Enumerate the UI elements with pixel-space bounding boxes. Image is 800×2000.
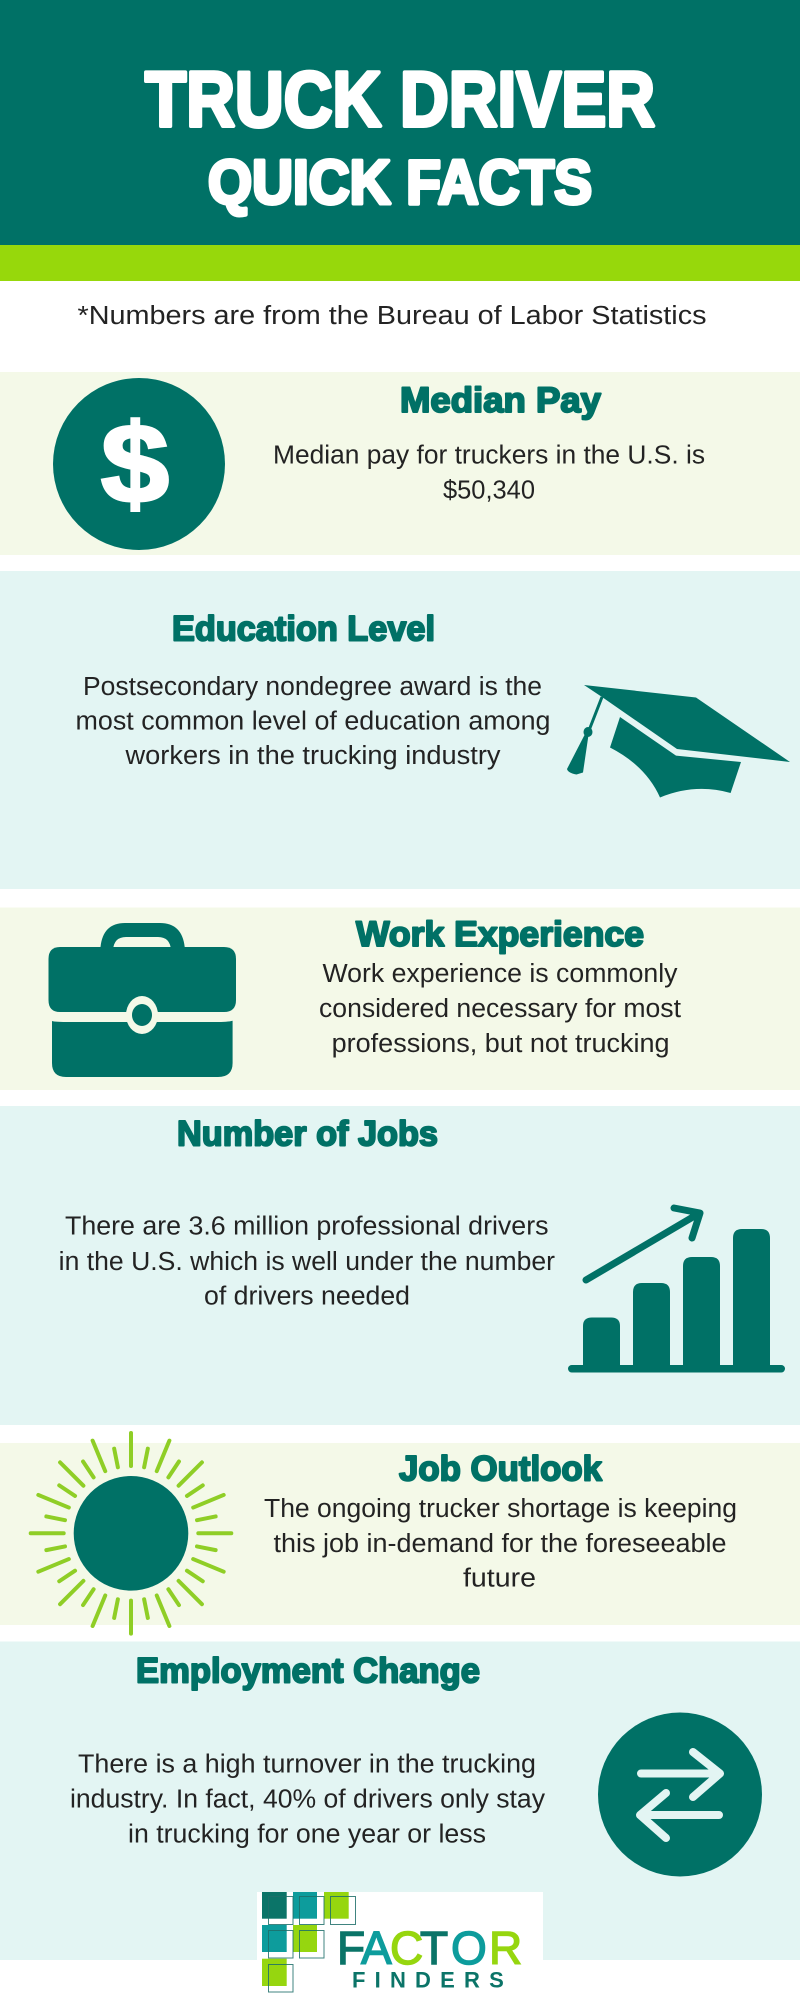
heading: employment change: Employment Change [136, 1651, 480, 1691]
header banner [0, 0, 800, 281]
text: work experience: considered necessary for most [319, 995, 681, 1023]
text: employment change: in trucking for one year or less [128, 1821, 486, 1849]
text: number of jobs: of drivers needed [204, 1283, 410, 1311]
text: education level: most common level of education among [76, 708, 550, 736]
text: job outlook: The ongoing trucker shortage is keeping [264, 1495, 737, 1523]
text: job outlook [264, 1495, 737, 1593]
icon: dollar circle: $ [101, 401, 169, 526]
text: work experience: Work experience is commonly [322, 960, 678, 988]
text: number of jobs: There are 3.6 million professional drivers [65, 1212, 548, 1240]
panel: education level [0, 571, 800, 889]
icon: exchange arrows circle [598, 1712, 762, 1876]
title [145, 55, 655, 218]
icon: dollar circle [53, 378, 225, 550]
text: education level [76, 673, 550, 770]
heading: job outlook: Job Outlook [399, 1448, 602, 1488]
text: employment change: There is a high turnover in the trucking [78, 1751, 536, 1779]
text: employment change [70, 1751, 545, 1849]
icon: sun [31, 1433, 231, 1634]
text: education level: workers in the trucking industry [124, 742, 501, 770]
heading: median pay: Median Pay [400, 380, 601, 420]
panel: median pay [0, 372, 800, 555]
logo wordmark: F [337, 1922, 365, 1974]
source note: *Numbers are from the Bureau of Labor Statistics [78, 302, 706, 330]
text: work experience: professions, but not trucking [332, 1030, 670, 1058]
panel: number of jobs [0, 1106, 800, 1425]
title: QUICK FACTS [208, 148, 592, 218]
panel: work experience [0, 908, 800, 1090]
logo wordmark: A [361, 1922, 392, 1974]
text: number of jobs [59, 1212, 556, 1311]
text: number of jobs: in the U.S. which is well under the number [59, 1248, 556, 1276]
bar chart icon with arrow [568, 1208, 785, 1372]
heading: work experience: Work Experience [356, 914, 644, 954]
text: median pay: $50,340 [443, 477, 535, 505]
text: median pay: Median pay for truckers in the U.S. is [273, 442, 705, 470]
text: job outlook: this job in-demand for the foreseeable [274, 1530, 726, 1558]
panel: job outlook [0, 1433, 800, 1634]
logo wordmark: O [451, 1922, 487, 1974]
logo subtitle: FINDERS [352, 1968, 513, 1993]
text: work experience [319, 960, 681, 1058]
text: education level: Postsecondary nondegree award is the [83, 673, 542, 701]
logo: factor finders [257, 1892, 543, 2000]
panel: employment change [0, 1642, 800, 1960]
title: TRUCK DRIVER [145, 55, 655, 143]
icon: graduation cap [567, 685, 790, 798]
logo wordmark: T [420, 1922, 448, 1974]
logo wordmark: R [489, 1922, 522, 1974]
heading: education level: Education Level [172, 608, 435, 648]
text: employment change: industry. In fact, 40% of drivers only stay [70, 1786, 545, 1814]
text: job outlook: future [463, 1565, 536, 1593]
logo wordmark: C [390, 1922, 423, 1974]
heading: number of jobs: Number of Jobs [177, 1114, 438, 1154]
text: median pay [273, 442, 705, 505]
icon: briefcase [48, 923, 236, 1077]
